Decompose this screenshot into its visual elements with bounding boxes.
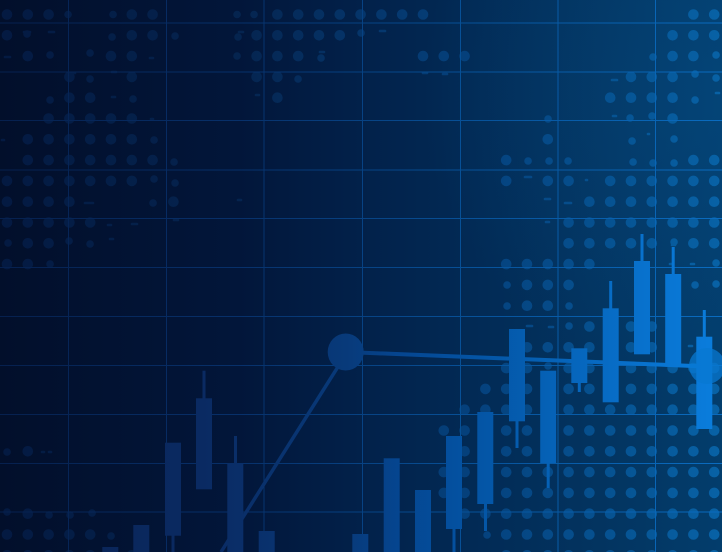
- candlesticks: right group: [446, 234, 712, 552]
- trend line with nodes: [221, 334, 706, 552]
- candlesticks: left group: [102, 371, 431, 552]
- node: left trend point: [328, 334, 364, 370]
- node: right trend point: [689, 348, 722, 384]
